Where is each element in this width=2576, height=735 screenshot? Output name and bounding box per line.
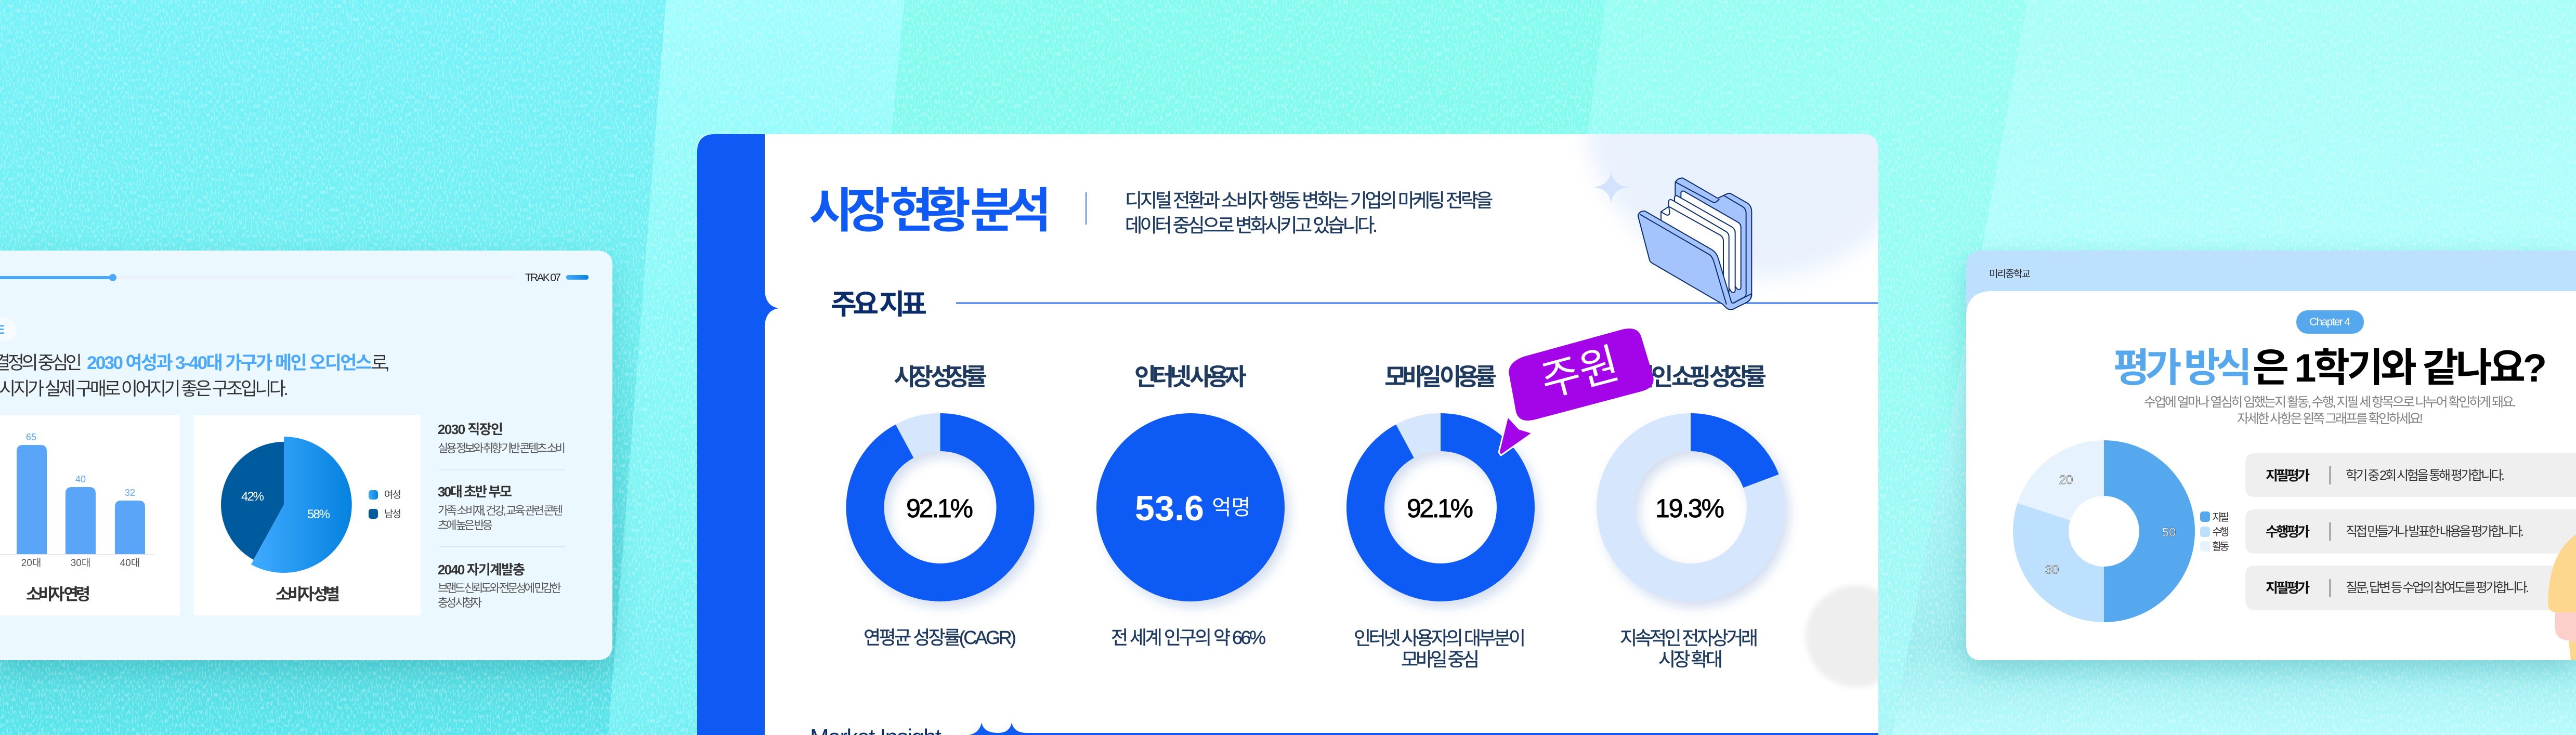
audience list: 츠에 높은 반응 [438, 519, 493, 532]
donut 92.1 [1365, 432, 1516, 582]
title: 평가 방식 [2113, 346, 2252, 390]
chapter chip: Chapter 4 [2309, 316, 2350, 328]
callout: purple name badge [1499, 329, 1654, 455]
bar values: 32 [125, 488, 135, 498]
heading text: 시지가 실제 구매로 이어지기 좋은 구조입니다. [0, 379, 289, 399]
school name: 미리중학교 [1989, 268, 2031, 280]
heading text: 로, [371, 353, 390, 373]
audience list: 가족 소비재, 건강, 교육 관련 콘텐 [438, 504, 563, 517]
panel: consumer age bar chart [0, 415, 180, 615]
row: participation evaluation: 질문, 답변 등 수업의 참여도를 평가합니다. [2346, 581, 2529, 595]
metric: internet users [1096, 363, 1285, 648]
donut chart: 30 [2045, 563, 2059, 577]
white slide body [1966, 291, 2576, 660]
metric: online shopping growth: 지속적인 전자상거래 [1620, 627, 1758, 649]
chart title: 소비자 성별 [276, 585, 340, 603]
illustration: character with yellow hair [2548, 534, 2576, 660]
row: performance evaluation: 수행평가 [2266, 524, 2310, 540]
panel: left slide card [0, 251, 612, 660]
pie: 58% [307, 507, 330, 521]
audience list [438, 422, 566, 609]
row: participation evaluation: 지필평가 [2266, 580, 2310, 596]
callout: purple name badge: 주원 [1536, 340, 1624, 406]
metric: market growth: 92.1% [906, 494, 973, 523]
icon: sparkle [1593, 170, 1629, 204]
audience list: 2030 직장인 [438, 422, 503, 437]
title: 시장 현황 분석 [809, 185, 1051, 238]
title [2113, 346, 2547, 390]
heading text [0, 353, 390, 399]
donut chart: 20 [2059, 473, 2073, 487]
audience list: 2040 자기계발층 [438, 562, 525, 578]
chart title: 소비자 연령 [26, 585, 90, 603]
donut legend: 수행 [2212, 526, 2229, 538]
donut 92.1 [865, 432, 1015, 582]
description [2144, 395, 2516, 426]
metric: internet users: 53.6 [1135, 489, 1204, 528]
donut chart: 50 [2162, 526, 2176, 540]
metric: mobile usage: 92.1% [1407, 494, 1473, 523]
legend [369, 489, 401, 520]
legend: 남성 [384, 508, 401, 520]
donut chart [2013, 440, 2195, 622]
audience list: 충성 시청자 [438, 596, 482, 609]
metric: online shopping growth: 19.3% [1655, 494, 1724, 523]
chapter chip [2296, 310, 2364, 334]
audience list: 브랜드 신뢰도와 전문성에 민감한 [438, 582, 561, 595]
panel: center market analysis card [697, 134, 1878, 735]
intro text: 데이터 중심으로 변화시키고 있습니다. [1125, 215, 1378, 236]
title: 은 1학기와 같나요? [2253, 346, 2547, 390]
description: 수업에 얼마나 열심히 임했는지 활동, 수행, 지필 세 항목으로 나누어 확인하게 돼요. [2144, 395, 2516, 410]
track label: TRAK 07 [525, 272, 561, 284]
section heading: key indicators [832, 290, 1878, 317]
bars [0, 445, 154, 555]
metric: mobile usage: 인터넷 사용자의 대부분이 [1354, 627, 1526, 649]
legend: 여성 [384, 489, 401, 501]
chapter chip [0, 318, 17, 341]
icon: folder with documents [1638, 178, 1751, 310]
row: participation evaluation [2245, 566, 2576, 610]
donut legend: 지필 [2212, 511, 2229, 523]
track label [525, 272, 589, 284]
row: written evaluation [2245, 453, 2576, 497]
heading text: 2030 여성과 3-40대 가구가 메인 오디언스 [87, 353, 372, 373]
row: performance evaluation: 직접 만들거나 발표한 내용을 평가합니다. [2346, 524, 2524, 539]
metric: mobile usage: 모바일 이용률 [1384, 363, 1497, 390]
metric: market growth: 연평균 성장률(CAGR) [864, 627, 1016, 648]
blue side bar with notch [697, 134, 779, 735]
decorative glow [1583, 0, 1937, 687]
title divider [1086, 192, 1087, 225]
pie: 42% [241, 490, 264, 504]
progress bar [0, 274, 514, 281]
metric: internet users: 억명 [1212, 495, 1251, 519]
axis labels [21, 557, 140, 569]
axis labels: 30대 [71, 557, 90, 569]
row: written evaluation: 학기 중 2회 시험을 통해 평가합니다. [2346, 468, 2505, 483]
section heading: market insight [810, 723, 1878, 735]
bar values [26, 432, 135, 498]
metric: internet users: 인터넷 사용자 [1134, 363, 1247, 390]
axis labels: 40대 [120, 557, 140, 569]
metric: mobile usage: 모바일 중심 [1401, 649, 1480, 670]
donut 19.3 [1616, 432, 1766, 582]
section heading: key indicators: 주요 지표 [831, 289, 927, 320]
description: 자세한 사항은 왼쪽 그래프를 확인하세요! [2237, 412, 2423, 426]
bar values: 65 [26, 432, 36, 442]
pie [221, 437, 352, 573]
metric: market growth: 시장 성장률 [894, 363, 987, 390]
intro text: 디지털 전환과 소비자 행동 변화는 기업의 마케팅 전략을 [1125, 190, 1493, 211]
metric: mobile usage [1354, 363, 1526, 670]
intro text [1125, 190, 1493, 236]
axis labels: 20대 [21, 557, 41, 569]
audience list: 30대 초반 부모 [438, 484, 512, 500]
donut legend: 활동 [2212, 541, 2229, 553]
metric: online shopping growth: 시장 확대 [1658, 649, 1723, 670]
panel: consumer gender pie chart [194, 415, 421, 615]
panel: right evaluation slide card [1966, 251, 2576, 660]
bar values: 40 [75, 474, 86, 484]
metric: market growth [864, 363, 1016, 648]
row: performance evaluation [2245, 509, 2576, 554]
metric: online shopping growth: 온라인 쇼핑 성장률 [1616, 363, 1767, 390]
solid circle [1096, 413, 1285, 601]
metric: internet users: 전 세계 인구의 약 66% [1111, 627, 1266, 648]
row: written evaluation: 지필평가 [2266, 468, 2310, 483]
donut legend [2200, 511, 2229, 553]
audience list: 실용 정보와 취향 기반 콘텐츠 소비 [438, 442, 566, 455]
metric: online shopping growth [1616, 363, 1767, 670]
